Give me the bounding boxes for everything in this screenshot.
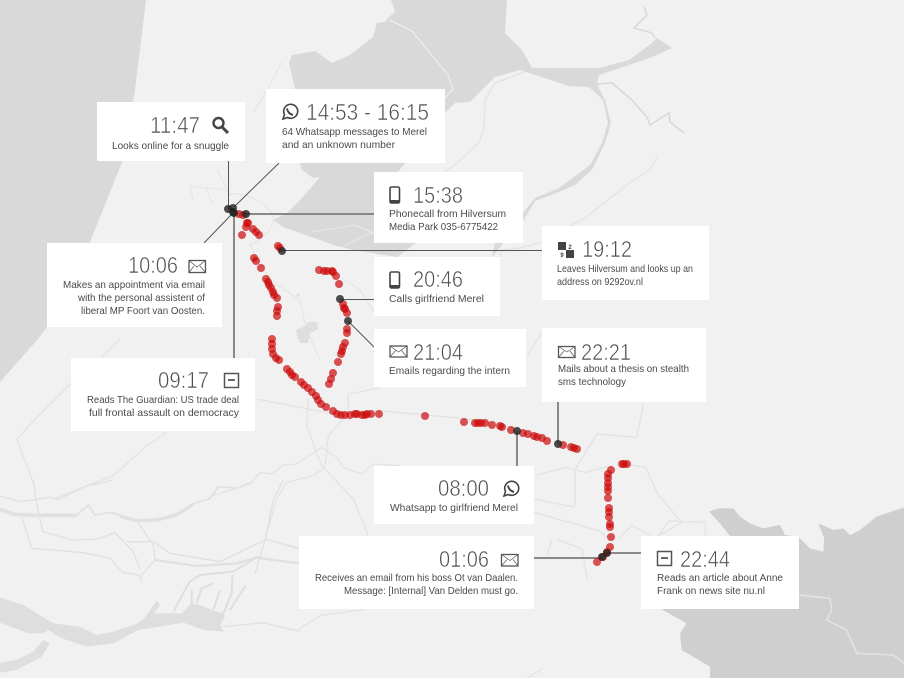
lake [296, 322, 318, 343]
callout: 08:00: Whatsapp to girlfriend Merel [390, 502, 518, 514]
callout: 20:46: 20:46 [413, 266, 463, 292]
callout: 19:12: address on 9292ov.nl [557, 276, 643, 288]
callout: 08:00: 08:00 [438, 475, 489, 501]
callout: 10:06 [47, 243, 222, 327]
callout: 14:53 - 16:15: and an unknown number [282, 139, 395, 151]
icon: whatsapp [504, 481, 519, 496]
icon: document [224, 374, 238, 388]
callout: 09:17: full frontal assault on democracy [89, 407, 240, 419]
icon: 9292: 2 [568, 245, 572, 251]
callout: 19:12: Leaves Hilversum and looks up an [557, 263, 693, 275]
callout: 10:06: 10:06 [128, 252, 178, 278]
callout: 15:38 [374, 172, 523, 243]
callout: 22:21: 22:21 [581, 339, 631, 365]
roads and rivers south [0, 480, 300, 673]
icon: 9292: 9 [560, 253, 564, 259]
callout: 10:06: liberal MP Foort van Oosten. [81, 305, 205, 317]
callout: 22:44: Reads an article about Anne [657, 572, 783, 584]
red location dots [235, 210, 631, 566]
callout: 19:12: 19:12 [582, 236, 632, 262]
icon: whatsapp [283, 104, 298, 119]
callout: 14:53 - 16:15: 14:53 - 16:15 [306, 99, 429, 125]
icon: phone [390, 187, 400, 203]
icon: search [214, 118, 228, 133]
callout: 19:12 [542, 226, 709, 300]
icon: envelope [390, 346, 407, 357]
callout: 22:44: Frank on news site nu.nl [657, 585, 765, 597]
callout: 11:47: 11:47 [150, 112, 200, 138]
icon: 9292 [558, 242, 574, 259]
callout: 10:06: with the personal assistent of [77, 292, 205, 304]
callout: 20:46: Calls girlfriend Merel [389, 293, 484, 305]
connector lines [204, 161, 641, 558]
callout: 08:00 [374, 466, 534, 524]
icon: phone [390, 272, 400, 288]
callout: 22:21: Mails about a thesis on stealth [558, 363, 689, 375]
hills [660, 507, 904, 678]
callout: 15:38: 15:38 [413, 182, 463, 208]
callout: 20:46 [374, 257, 500, 316]
callout: 22:21: sms technology [558, 376, 627, 388]
callout: 21:04: 21:04 [413, 339, 463, 365]
callout: 21:04: Emails regarding the intern [389, 365, 510, 377]
callout: 22:44 [641, 536, 799, 609]
icon: envelope [558, 346, 575, 358]
callout: 15:38: Media Park 035-6775422 [389, 221, 498, 233]
icon: envelope [189, 260, 206, 272]
callout: 14:53 - 16:15 [266, 89, 445, 163]
dark event markers [224, 204, 611, 561]
callout: 21:04 [374, 329, 526, 387]
callout: 11:47 [97, 102, 245, 161]
callout: 01:06: 01:06 [439, 546, 489, 572]
callout: 14:53 - 16:15: 64 Whatsapp messages to Merel [282, 126, 427, 138]
callout: 22:44: 22:44 [680, 546, 730, 572]
callout: 10:06: Makes an appointment via email [63, 279, 205, 291]
callout: 09:17: 09:17 [158, 367, 209, 393]
callout: 01:06: Message: [Internal] Van Delden must go. [344, 585, 518, 597]
callout: 09:17 [71, 358, 255, 431]
callout: 11:47: Looks online for a snuggle [112, 140, 229, 152]
callout: 22:21 [542, 328, 706, 402]
icon: document [658, 552, 672, 566]
callout: 09:17: Reads The Guardian: US trade deal [87, 394, 239, 406]
callout: 01:06: Receives an email from his boss Ot van Daalen. [315, 572, 518, 584]
callout: 15:38: Phonecall from Hilversum [389, 208, 506, 220]
icon: envelope [502, 554, 518, 566]
callout: 01:06 [299, 536, 534, 609]
